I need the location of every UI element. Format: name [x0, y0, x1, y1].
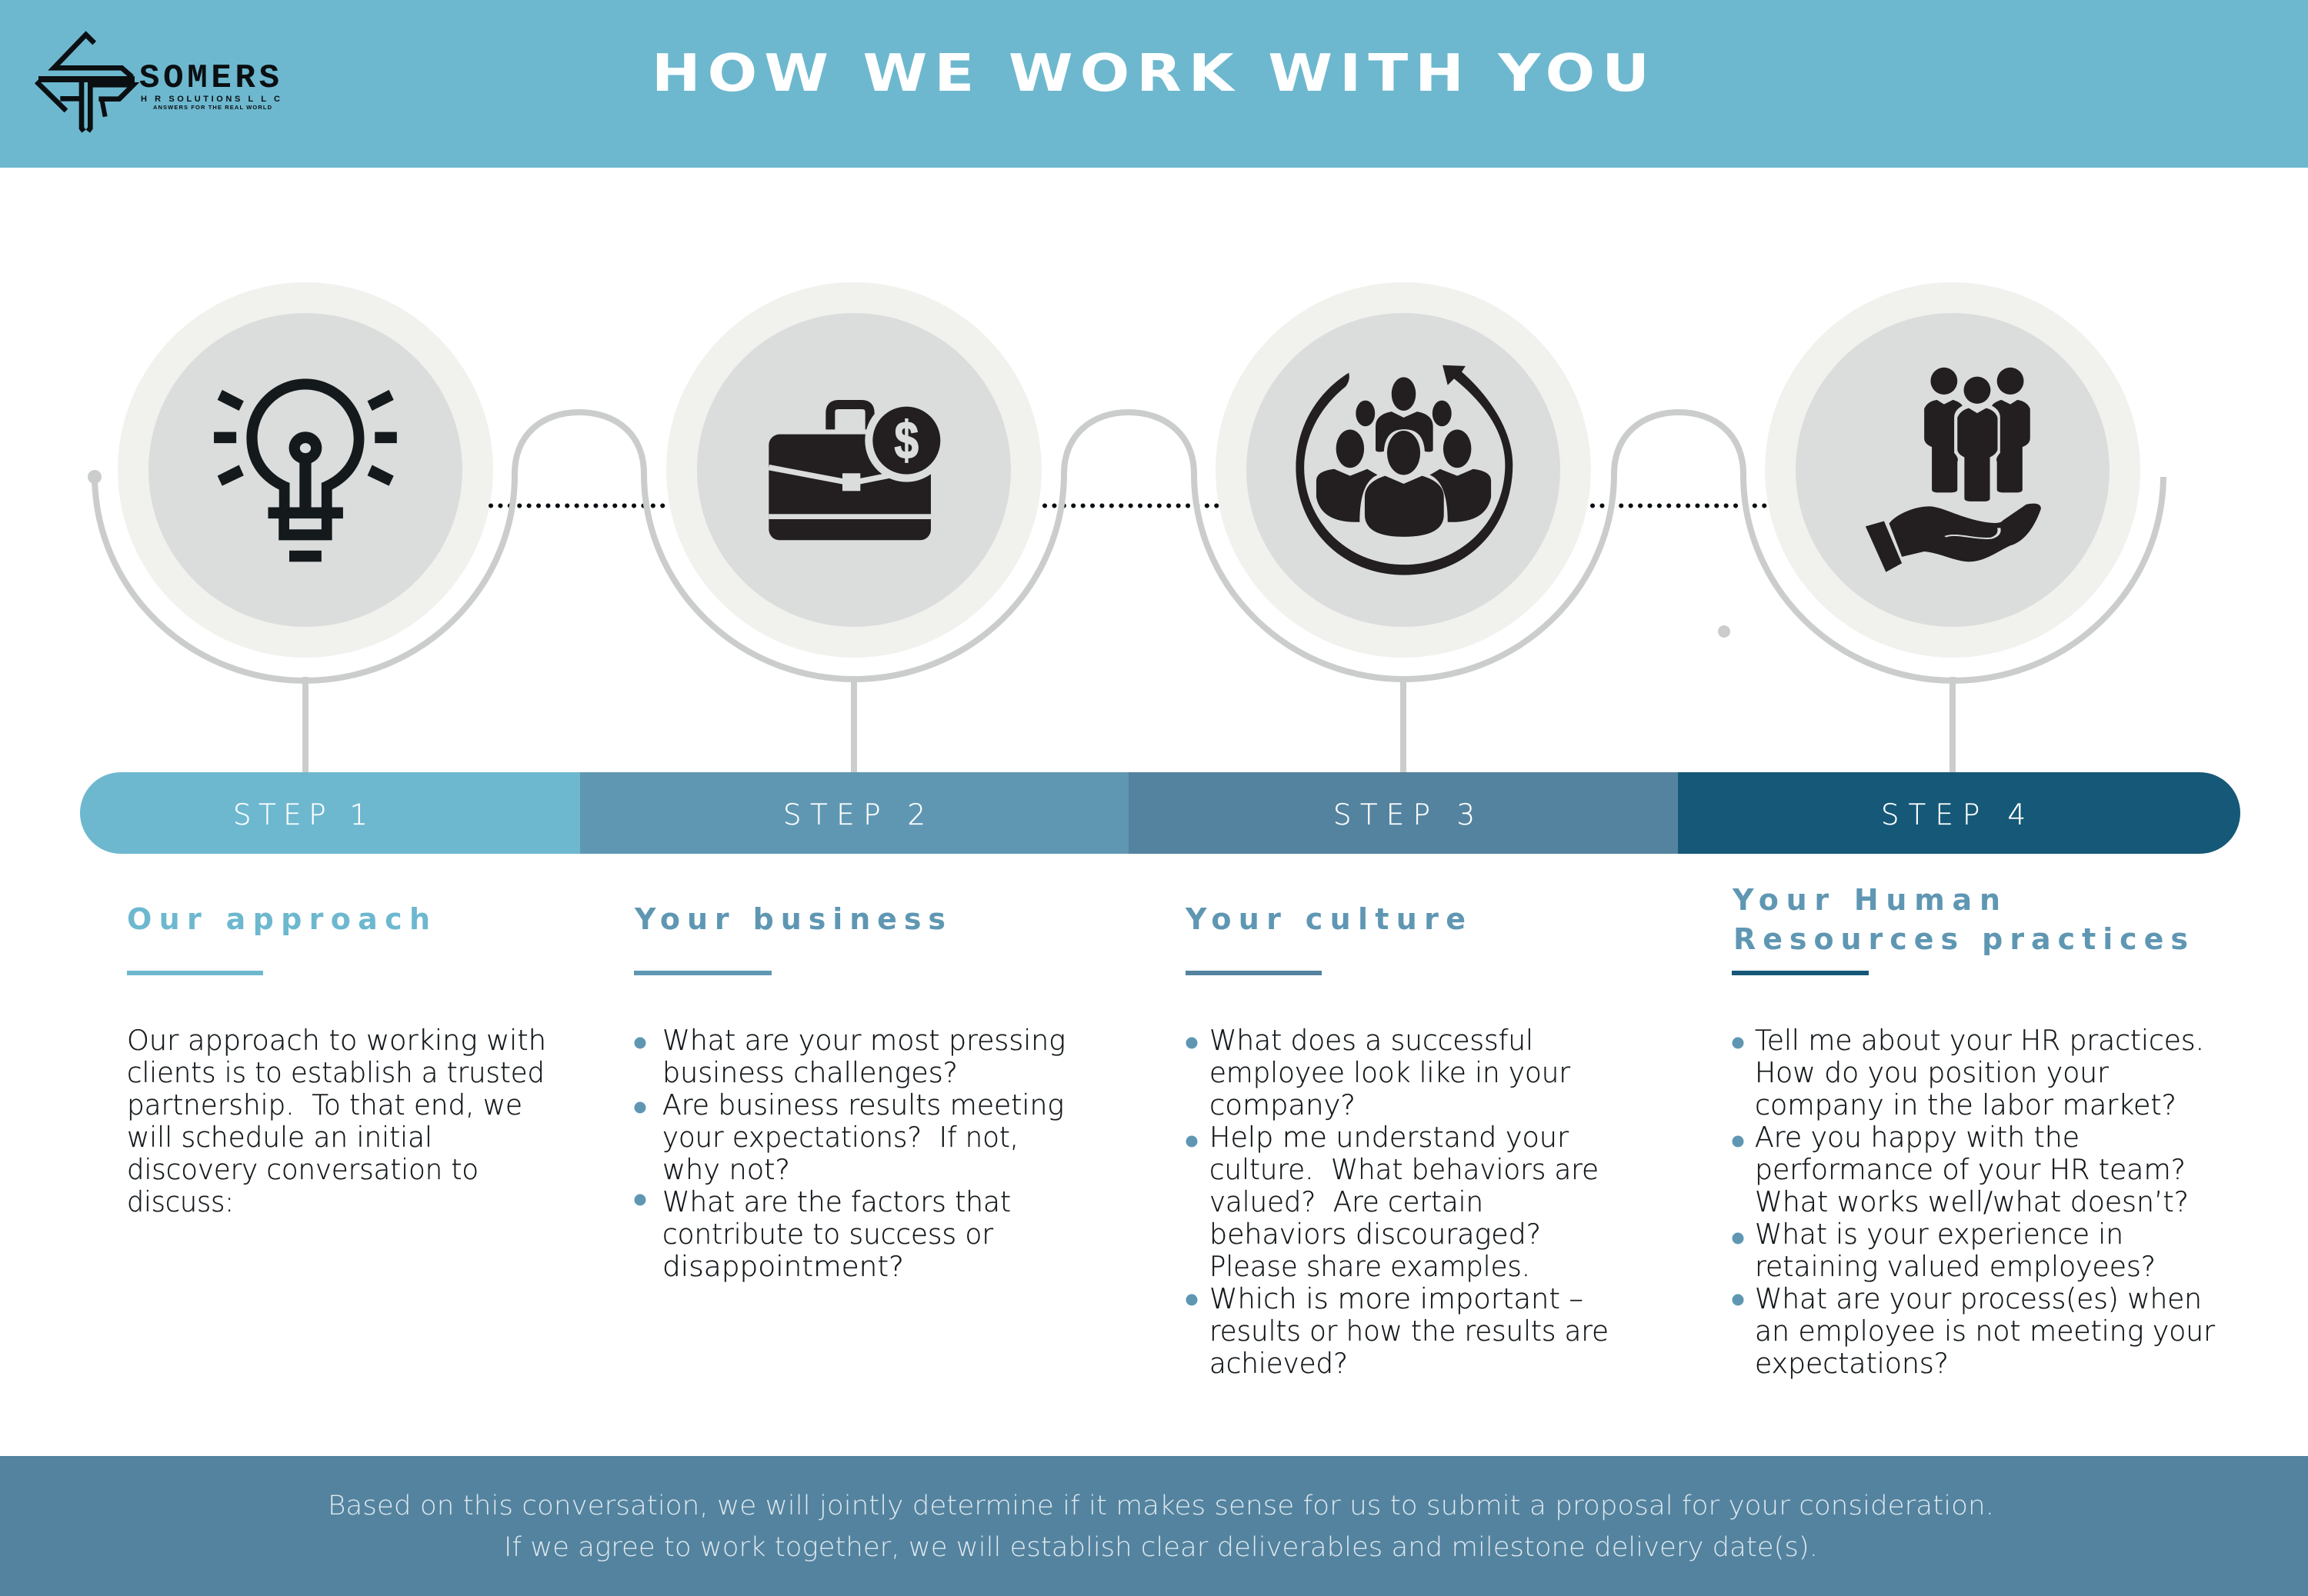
body text: an employee is not meeting your [1755, 1314, 2215, 1348]
body text: performance of your HR team? [1755, 1153, 2186, 1186]
underline [1186, 971, 1322, 975]
body text: valued? Are certain [1209, 1185, 1483, 1218]
heading: Your Human [1732, 883, 2000, 917]
body text: employee look like in your [1209, 1056, 1570, 1089]
header band [0, 0, 2308, 168]
body text: What are your most pressing [662, 1024, 1066, 1057]
underline [127, 971, 263, 975]
heading: Your culture [1185, 902, 1466, 936]
body text: Tell me about your HR practices. [1755, 1024, 2204, 1057]
column 4: your human resources practices [1732, 883, 2215, 1380]
bullets [634, 1037, 646, 1206]
body text: Are you happy with the [1755, 1121, 2080, 1154]
circle: step 3 [1216, 282, 1591, 658]
body text: What works well/what doesn’t? [1755, 1185, 2189, 1218]
body text: behaviors discouraged? [1209, 1218, 1541, 1251]
logo mark [36, 35, 135, 132]
logo: Somers HR Solutions [36, 35, 280, 132]
body text: disappointment? [662, 1250, 904, 1283]
icon: hand holding people [1866, 368, 2041, 572]
body text: What does a successful [1209, 1024, 1533, 1057]
column 3: your culture [1185, 902, 1609, 1380]
logo subtitle: H R SOLUTIONS L L C [141, 95, 280, 104]
step 2 segment [580, 772, 1129, 854]
body text: contribute to success or [662, 1218, 993, 1251]
title: HOW WE WORK WITH YOU [652, 43, 1656, 103]
body text: discovery conversation to [127, 1153, 479, 1186]
body text [1209, 1024, 1609, 1380]
body text [662, 1024, 1066, 1283]
body text: results or how the results are [1209, 1314, 1609, 1348]
body text: business challenges? [662, 1056, 958, 1089]
body text: your expectations? If not, [662, 1121, 1019, 1154]
step circles [118, 282, 2140, 658]
step 4 label: STEP 4 [1881, 798, 2026, 831]
icon: briefcase with dollar coin [769, 399, 948, 540]
body text: Please share examples. [1209, 1250, 1530, 1283]
step 4 segment [1678, 772, 2240, 854]
heading: Resources practices [1733, 922, 2188, 956]
body text: achieved? [1209, 1347, 1348, 1380]
heading: Our approach [127, 902, 430, 936]
body text: will schedule an initial [127, 1121, 432, 1154]
body text: What is your experience in [1755, 1218, 2123, 1251]
body text: Our approach to working with [127, 1024, 546, 1057]
step 3 segment [1129, 772, 1678, 854]
logo tagline: ANSWERS FOR THE REAL WORLD [153, 104, 272, 111]
body text: expectations? [1755, 1347, 1949, 1380]
heading [1732, 883, 2188, 956]
body text: clients is to establish a trusted [127, 1056, 545, 1089]
body text [127, 1024, 546, 1218]
body text: What are the factors that [662, 1185, 1011, 1218]
step 1 label: STEP 1 [233, 798, 368, 831]
stems to step bar [305, 677, 1953, 774]
body text: Are business results meeting [662, 1088, 1064, 1121]
icon: briefcase with dollar coin: $ [895, 411, 919, 470]
step 2 label: STEP 2 [783, 798, 926, 831]
body text: partnership. To that end, we [127, 1088, 522, 1121]
body text: company? [1209, 1088, 1356, 1121]
body text: What are your process(es) when [1755, 1282, 2202, 1315]
footer band [0, 1456, 2308, 1596]
circle: step 1 [118, 282, 493, 658]
step 3 label: STEP 3 [1333, 798, 1475, 831]
circle: step 2 [666, 282, 1042, 658]
column 2: your business [634, 902, 1066, 1283]
body text: company in the labor market? [1755, 1088, 2176, 1121]
body text: How do you position your [1755, 1056, 2109, 1089]
body text: retaining valued employees? [1755, 1250, 2156, 1283]
footer text: If we agree to work together, we will establish clear deliverables and milestone delivery date(s). [504, 1532, 1818, 1563]
wavy connector line [95, 412, 2163, 774]
footer text [328, 1491, 1994, 1563]
body text: Which is more important – [1209, 1282, 1583, 1315]
icon: team in circular arrow [1296, 365, 1513, 575]
dotted connectors [491, 503, 1766, 508]
decorative dot [1718, 625, 1730, 638]
underline [1732, 971, 1869, 975]
body text [1755, 1024, 2215, 1380]
step bar [80, 772, 2240, 854]
body text: Help me understand your [1209, 1121, 1569, 1154]
logo wordmark: SOMERS [139, 59, 279, 98]
underline [634, 971, 772, 975]
body text: discuss: [127, 1185, 234, 1218]
heading: Your business [634, 902, 946, 936]
body text: why not? [662, 1153, 790, 1186]
bullets [1186, 1037, 1197, 1306]
bullets [1733, 1037, 1743, 1306]
footer text: Based on this conversation, we will jointly determine if it makes sense for us to submit a proposal for your consideration. [328, 1491, 1994, 1521]
step 1 segment [80, 772, 580, 854]
connector end dot [88, 470, 102, 484]
body text: culture. What behaviors are [1209, 1153, 1599, 1186]
circle: step 4 [1765, 282, 2140, 658]
icon: light bulb [214, 378, 397, 561]
column 1: our approach [127, 902, 546, 1218]
